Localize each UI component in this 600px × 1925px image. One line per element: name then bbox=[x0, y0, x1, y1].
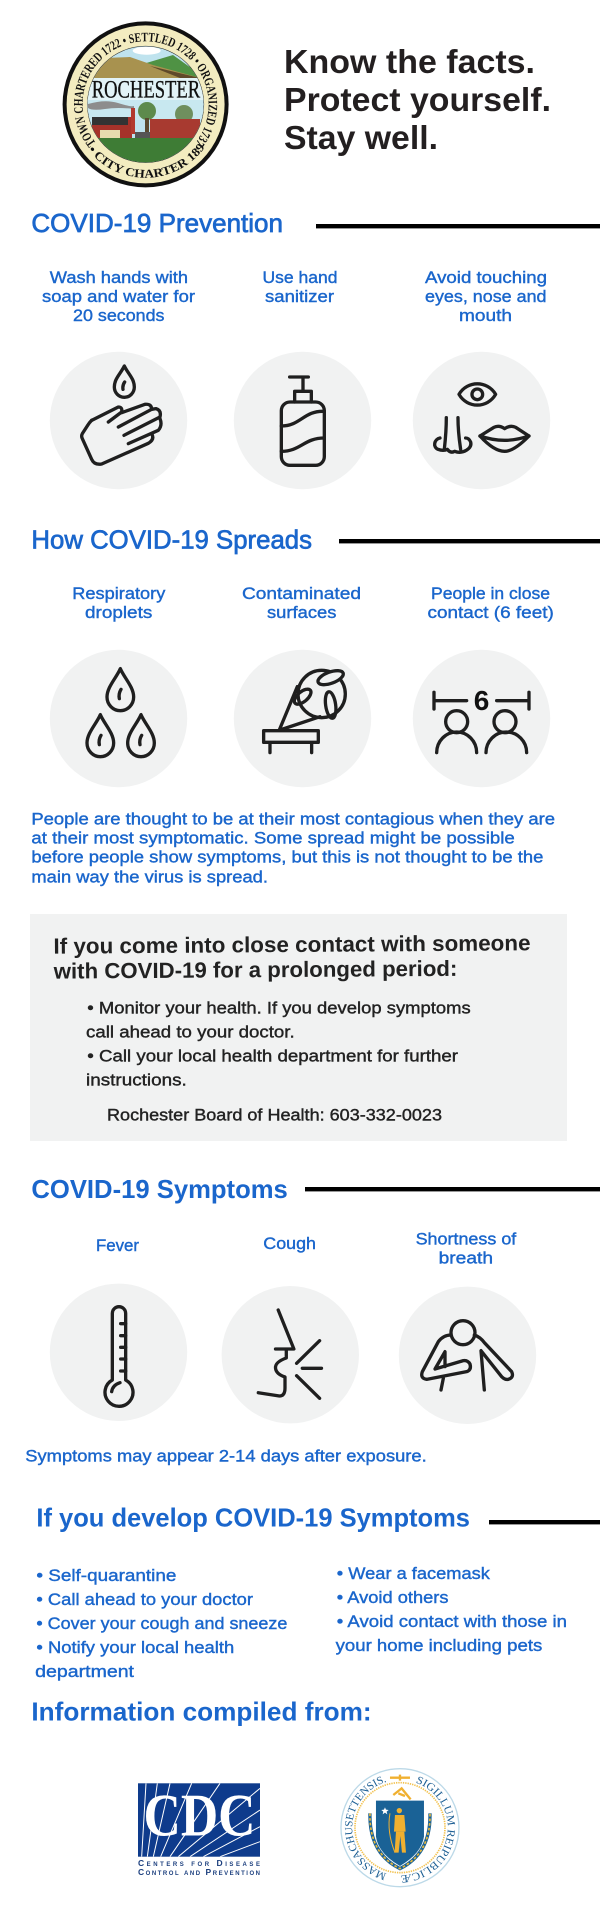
panel heading: If you come into close contact with someone bbox=[53, 930, 531, 959]
label: shortness of breath: breath bbox=[439, 1248, 493, 1267]
label: avoid touching: Avoid touching bbox=[425, 268, 547, 287]
heading: How COVID-19 Spreads: How COVID-19 Spreads bbox=[31, 524, 312, 554]
section: How COVID-19 Spreads bbox=[31, 524, 600, 787]
logo: CDC: Centers for Disease bbox=[138, 1858, 260, 1868]
list: right column: • Avoid contact with those in bbox=[337, 1612, 567, 1631]
label: respiratory droplets: droplets bbox=[85, 603, 152, 622]
label: cough: Cough bbox=[263, 1234, 316, 1253]
text block: contagious paragraph: before people show symptoms, but this is not thought to be the bbox=[31, 847, 543, 866]
label: respiratory droplets bbox=[72, 584, 166, 622]
label: people in close contact bbox=[428, 584, 554, 622]
list: right column: your home including pets bbox=[336, 1636, 542, 1655]
icon: hand and water drop bbox=[50, 352, 187, 489]
icon: two people six feet apart bbox=[413, 650, 550, 787]
seal: City of Rochester bbox=[62, 21, 229, 188]
label: avoid touching bbox=[425, 268, 547, 325]
heading: COVID-19 Symptoms: COVID-19 Symptoms bbox=[31, 1174, 288, 1204]
label: wash hands bbox=[42, 268, 195, 325]
label: people in close contact: contact (6 feet) bbox=[428, 603, 554, 622]
logo: Massachusetts state seal: MASSACHUSETTENSIS. bbox=[344, 1776, 386, 1880]
text: symptoms timing: Symptoms may appear 2-14 days after exposure. bbox=[25, 1446, 427, 1465]
label: hand sanitizer: sanitizer bbox=[265, 287, 334, 306]
label: fever: Fever bbox=[96, 1236, 139, 1255]
panel heading: with COVID-19 for a prolonged period: bbox=[53, 956, 457, 984]
title: Know the facts. bbox=[284, 43, 535, 80]
section: If you develop COVID-19 Symptoms bbox=[35, 1503, 600, 1681]
list: right column: • Wear a facemask bbox=[337, 1564, 490, 1583]
icon: eye, nose and mouth bbox=[413, 352, 550, 489]
list: left column: • Notify your local health bbox=[36, 1638, 234, 1657]
logo: CDC: Control and Prevention bbox=[138, 1867, 260, 1877]
icon: coughing face bbox=[222, 1286, 359, 1423]
label: shortness of breath bbox=[416, 1229, 517, 1267]
label: wash hands: 20 seconds bbox=[73, 306, 164, 325]
list: left column: department bbox=[35, 1662, 134, 1681]
logo: Massachusetts state seal: SIGILLUM REIPUBLICÆ bbox=[401, 1776, 456, 1883]
logo: CDC bbox=[138, 1782, 260, 1877]
list: left column: • Cover your cough and sneeze bbox=[36, 1614, 287, 1633]
icon: thermometer bbox=[50, 1284, 187, 1421]
label: wash hands: soap and water for bbox=[42, 287, 195, 306]
text block: contagious paragraph bbox=[31, 809, 555, 886]
text block: contagious paragraph: People are thought to be at their most contagious when they are bbox=[31, 809, 555, 828]
icon: two people six feet apart: 6 bbox=[474, 685, 489, 716]
list: right column: • Avoid others bbox=[337, 1588, 448, 1607]
icon: virus on a surface bbox=[234, 650, 371, 787]
logo: Massachusetts state seal bbox=[340, 1768, 460, 1888]
icon: three droplets bbox=[50, 650, 187, 787]
seal: City of Rochester: ROCHESTER bbox=[92, 76, 200, 104]
label: contaminated surfaces bbox=[242, 584, 361, 622]
text block: contagious paragraph: at their most symptomatic. Some spread might be possible bbox=[31, 828, 515, 847]
title bbox=[284, 43, 551, 156]
label: avoid touching: mouth bbox=[459, 306, 512, 325]
icon: person short of breath bbox=[399, 1287, 536, 1424]
list: left column bbox=[35, 1566, 287, 1681]
panel advice list: call ahead to your doctor. bbox=[86, 1022, 295, 1041]
label: hand sanitizer bbox=[262, 268, 338, 306]
section: COVID-19 Symptoms bbox=[31, 1174, 600, 1424]
list: left column: • Self-quarantine bbox=[36, 1566, 176, 1585]
heading: COVID-19 Prevention: COVID-19 Prevention bbox=[31, 208, 283, 238]
section: COVID-19 Prevention bbox=[31, 208, 600, 489]
panel advice list: instructions. bbox=[86, 1070, 187, 1089]
logo: CDC: CDC bbox=[144, 1782, 256, 1848]
label: contaminated surfaces: surfaces bbox=[267, 603, 336, 622]
label: respiratory droplets: Respiratory bbox=[72, 584, 166, 603]
panel advice list: • Call your local health department for further bbox=[87, 1046, 458, 1065]
label: shortness of breath: Shortness of bbox=[416, 1229, 517, 1248]
title: Protect yourself. bbox=[284, 81, 551, 118]
label: wash hands: Wash hands with bbox=[50, 268, 188, 287]
text block: contagious paragraph: main way the virus is spread. bbox=[31, 867, 268, 886]
list: right column bbox=[336, 1564, 567, 1655]
title: Stay well. bbox=[284, 119, 438, 156]
heading: if you develop symptoms: If you develop COVID-19 Symptoms bbox=[36, 1503, 470, 1533]
panel heading bbox=[52, 930, 531, 984]
label: contaminated surfaces: Contaminated bbox=[242, 584, 361, 603]
panel advice list bbox=[86, 998, 471, 1089]
icon: sanitizer bottle bbox=[234, 352, 371, 489]
label: hand sanitizer: Use hand bbox=[262, 268, 338, 287]
heading: information compiled from: Information compiled from: bbox=[31, 1697, 372, 1727]
label: people in close contact: People in close bbox=[431, 584, 550, 603]
panel advice list: • Monitor your health. If you develop symptoms bbox=[87, 998, 471, 1017]
list: left column: • Call ahead to your doctor bbox=[36, 1590, 253, 1609]
seal: City of Rochester: TOWN CHARTERED 1722 • SETTLED 1728 • ORGANIZED 1737 bbox=[74, 32, 218, 148]
phone number: Rochester Board of Health: 603-332-0023 bbox=[107, 1105, 442, 1124]
label: avoid touching: eyes, nose and bbox=[425, 287, 546, 306]
panel: close contact advice bbox=[30, 914, 567, 1141]
